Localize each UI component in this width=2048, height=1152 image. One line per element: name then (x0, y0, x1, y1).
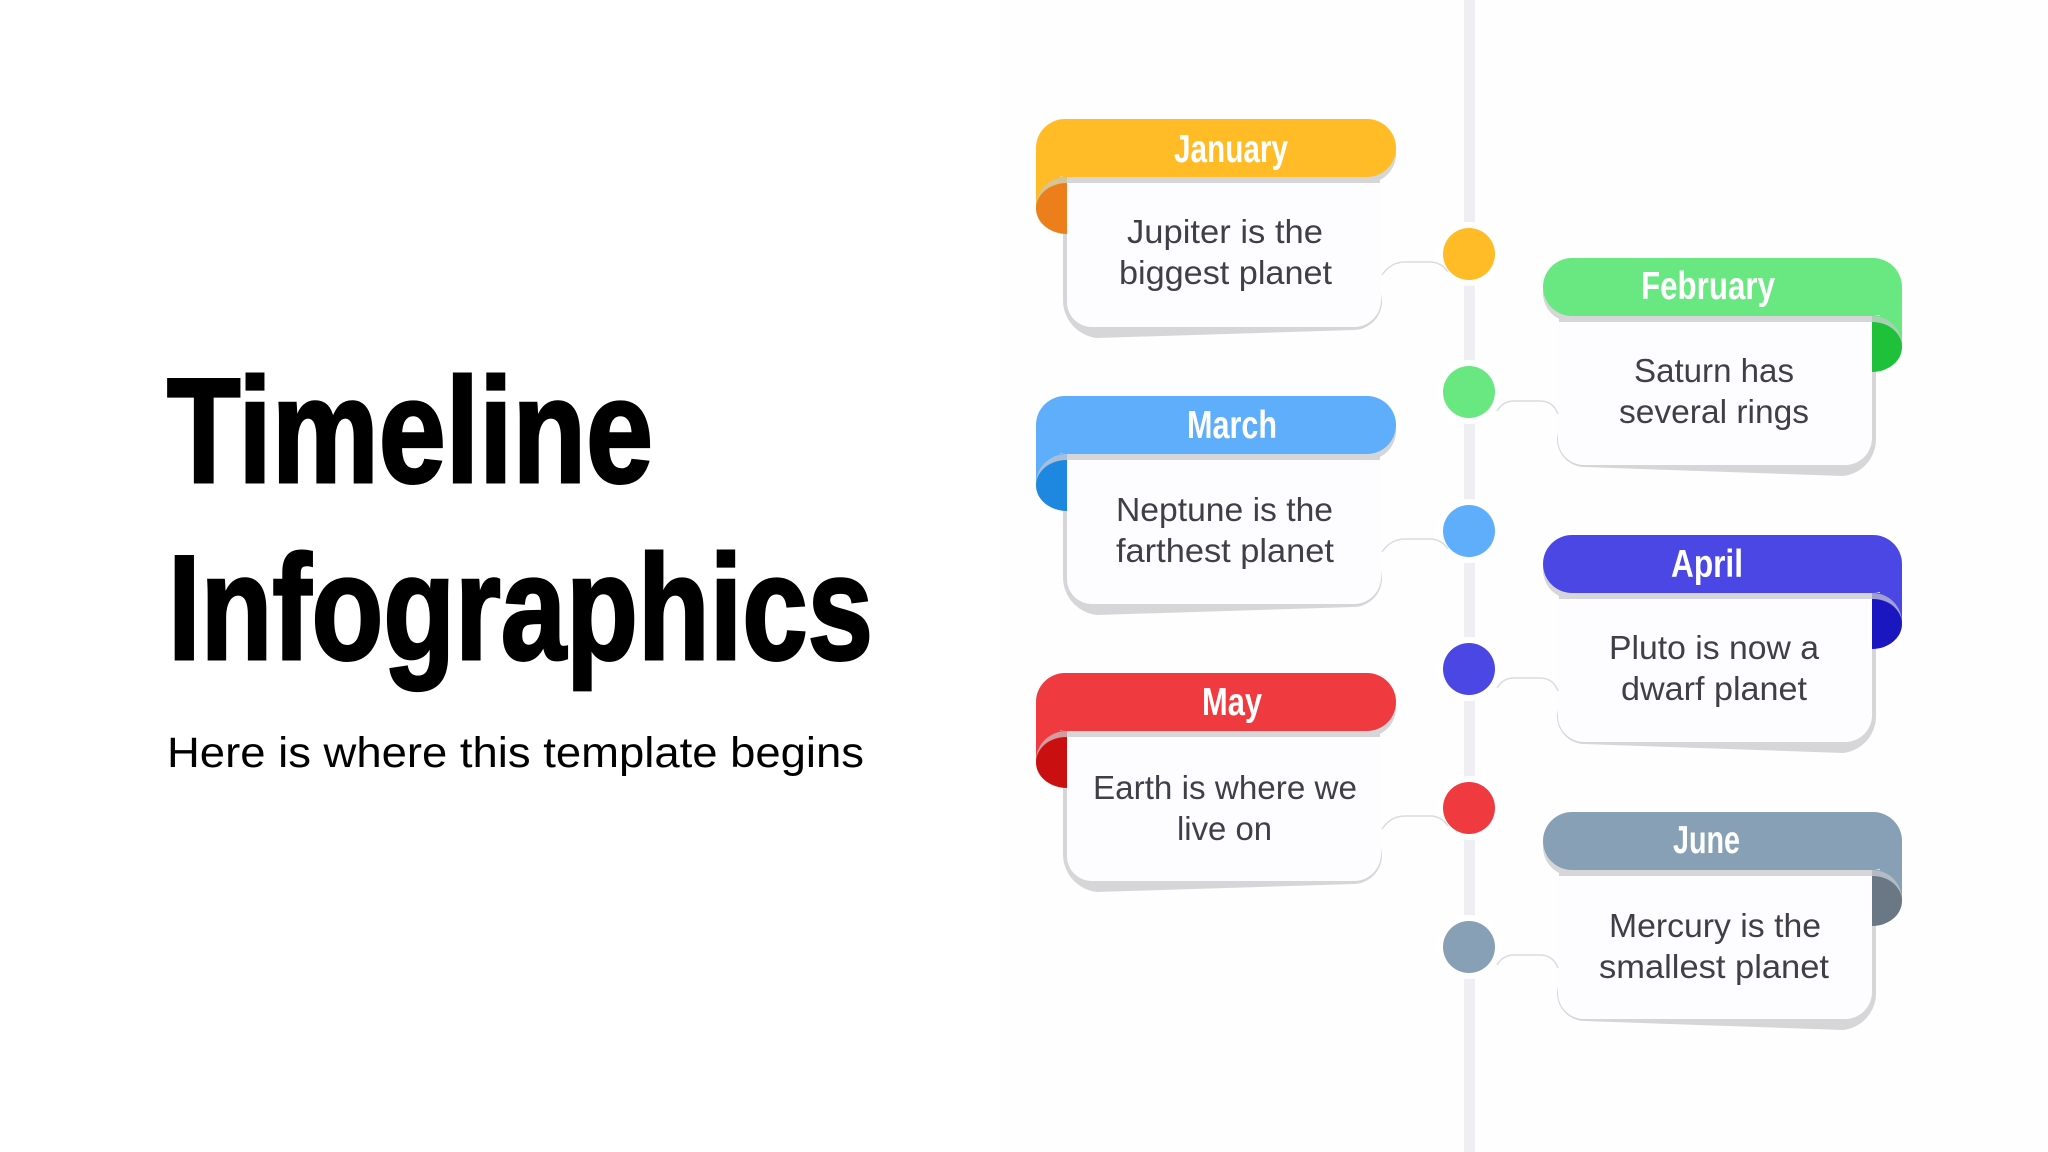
title (167, 347, 873, 691)
card: January (1036, 119, 1448, 338)
timeline axis (1464, 0, 1475, 1152)
card: May: Earth is where we (1093, 769, 1357, 806)
card: May (1036, 673, 1448, 892)
dot: March (1437, 499, 1501, 563)
card: April (1497, 535, 1902, 753)
subtitle: Here is where this template begins (167, 729, 864, 777)
card: May: live on (1177, 810, 1272, 847)
card: March: Neptune is the (1116, 491, 1333, 528)
card: February: Saturn has (1634, 352, 1794, 389)
card: June: Mercury is the (1609, 907, 1821, 944)
dot: May (1437, 776, 1501, 840)
card: January: Jupiter is the (1127, 213, 1323, 250)
card: April: April (1671, 543, 1743, 586)
card: February: several rings (1619, 393, 1809, 430)
card: May: May (1202, 681, 1262, 724)
dot: February (1437, 360, 1501, 424)
card: January: January (1174, 128, 1288, 171)
dot: January (1437, 222, 1501, 286)
card: March (1036, 396, 1448, 615)
dot: April (1437, 637, 1501, 701)
card: April: dwarf planet (1621, 670, 1807, 707)
title: Timeline (167, 347, 653, 514)
card: March: March (1187, 404, 1277, 447)
dot: June (1437, 915, 1501, 979)
card: June: smallest planet (1599, 948, 1829, 985)
card: February: February (1641, 265, 1775, 308)
card: June (1497, 812, 1902, 1030)
title: Infographics (168, 524, 873, 691)
card: June: June (1673, 819, 1740, 862)
card: February (1497, 258, 1902, 476)
card: January: biggest planet (1119, 254, 1332, 291)
card: April: Pluto is now a (1609, 629, 1820, 666)
card: March: farthest planet (1116, 532, 1334, 569)
